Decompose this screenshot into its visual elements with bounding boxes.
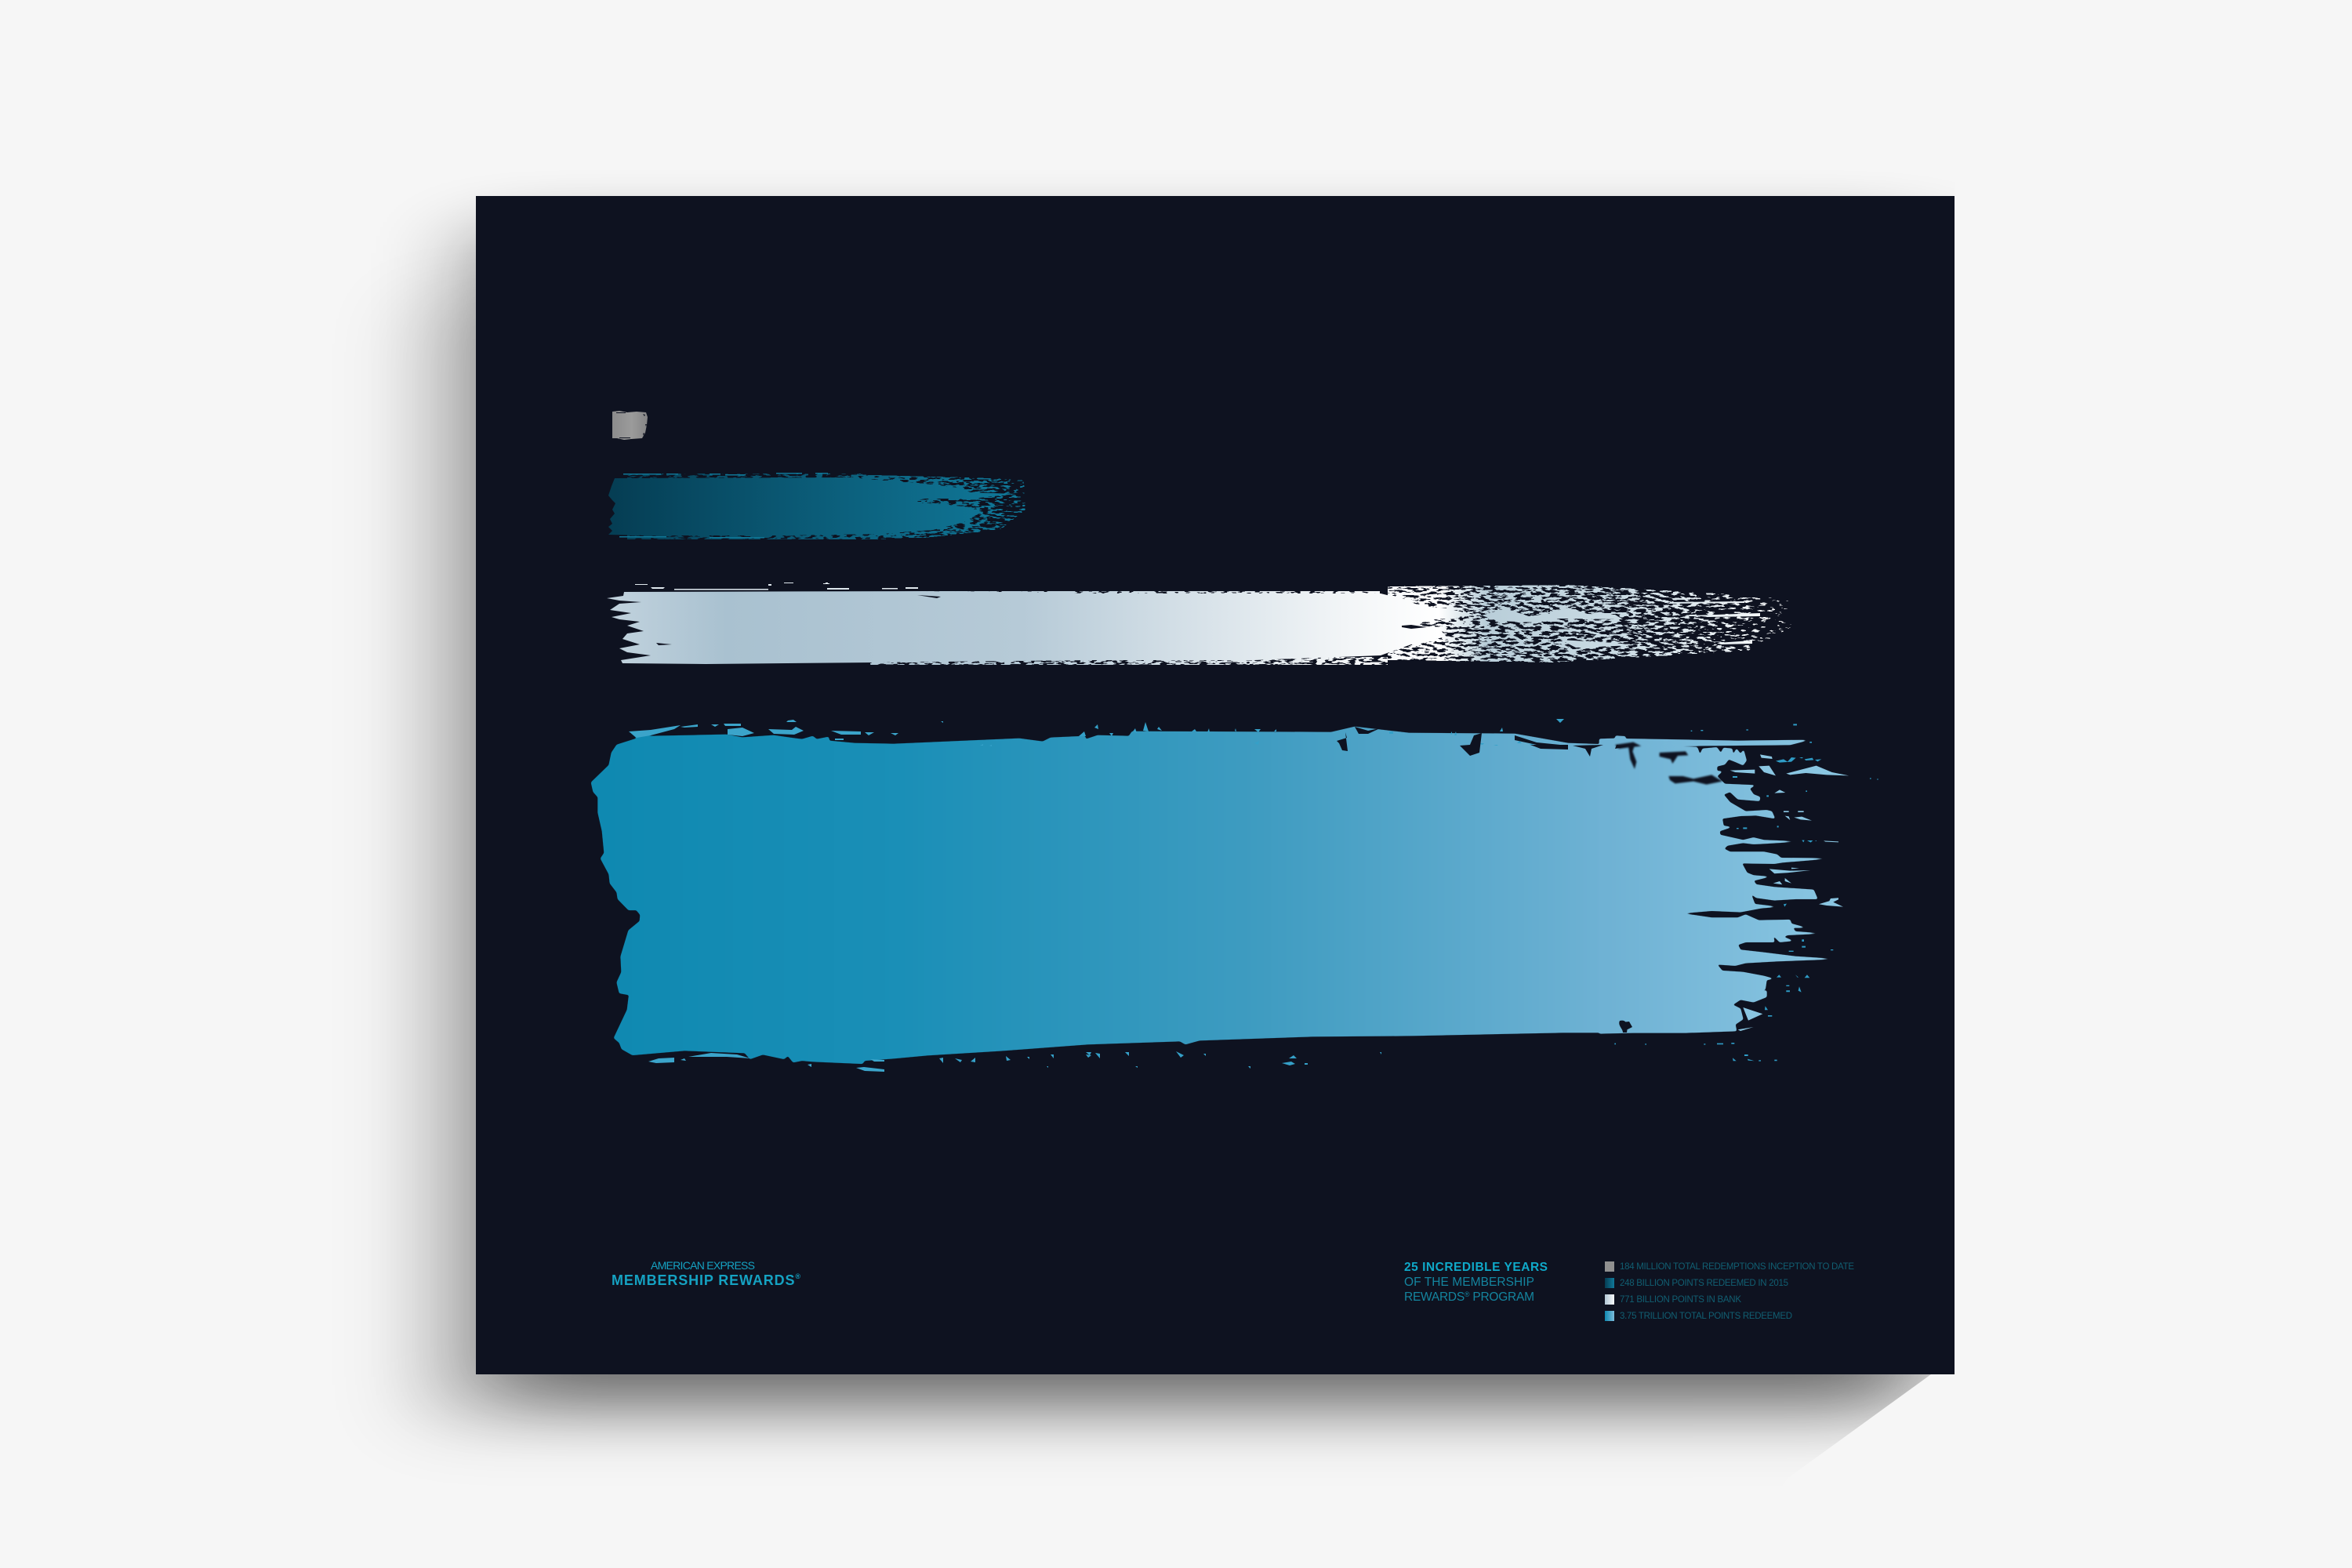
blue speckles above and below body — [939, 719, 1737, 1069]
brush bar: gray, 184 million total redemptions — [612, 411, 648, 440]
title line two: OF THE MEMBERSHIP — [1404, 1276, 1534, 1289]
loose fringe fragments — [1614, 724, 1878, 1062]
poster: dark panel — [476, 196, 1955, 1374]
legend item: 248 billion: 248 BILLION POINTS REDEEMED IN 2015 — [1620, 1279, 1788, 1288]
blue body with torn fringe — [591, 727, 1835, 1064]
title line three: ® — [1465, 1290, 1470, 1298]
legend — [1605, 1261, 1854, 1321]
brush bar: teal, 248 billion points redeemed in 2015 — [604, 470, 1027, 543]
title line three: REWARDS — [1404, 1290, 1465, 1304]
title line one: 25 INCREDIBLE YEARS — [1404, 1261, 1548, 1274]
title line three: PROGRAM — [1469, 1290, 1534, 1304]
footer title: 25 incredible years — [1404, 1261, 1548, 1304]
brush bar: white, 771 billion points in bank — [607, 583, 1791, 665]
top and bottom torn strips — [629, 720, 898, 1072]
logo: American Express Membership Rewards — [612, 1259, 800, 1288]
legend item: 184 million: 184 MILLION TOTAL REDEMPTIONS INCEPTION TO DATE — [1620, 1262, 1854, 1272]
brush bar: blue, 3.75 trillion total points redeemed — [591, 719, 1878, 1072]
logo line: Membership Rewards: MEMBERSHIP REWARDS — [612, 1272, 794, 1288]
logo line: American Express: AMERICAN EXPRESS — [651, 1259, 755, 1272]
legend item: 3.75 trillion: 3.75 TRILLION TOTAL POINTS REDEEMED — [1620, 1312, 1792, 1321]
legend item: 771 billion: 771 BILLION POINTS IN BANK — [1620, 1295, 1741, 1305]
poster drop shadow — [416, 227, 1917, 1431]
small dark marks on blue body — [1337, 727, 1632, 1033]
logo line: Membership Rewards: ® — [795, 1272, 800, 1280]
